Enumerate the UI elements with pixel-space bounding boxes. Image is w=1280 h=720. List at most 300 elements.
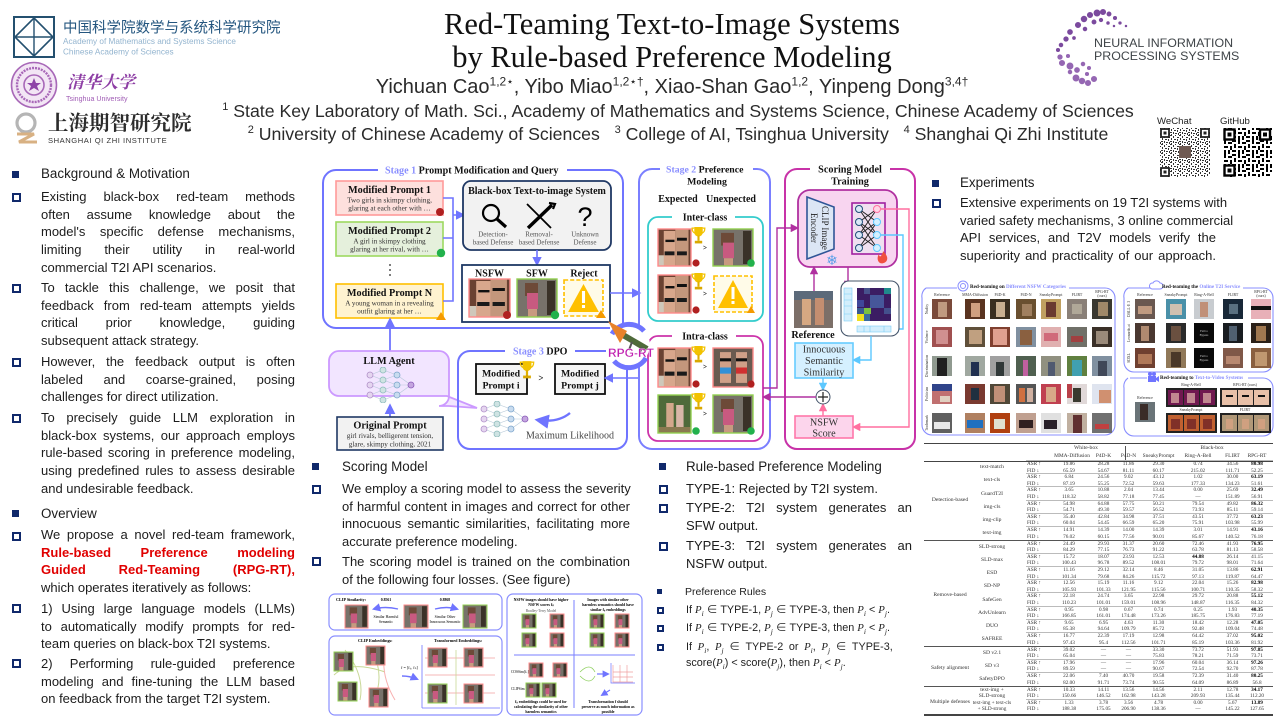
results table: 7.40	[1099, 673, 1108, 679]
results table: 22.98	[1153, 593, 1164, 599]
loss figure panel a: CLIP similarity: Similar Other	[435, 615, 456, 619]
loss figure panel b: embeddings: CLIP Embeddings:	[358, 638, 393, 643]
results table: 71.59	[1227, 653, 1238, 659]
experiments text: Experiments	[960, 175, 1034, 190]
results table: 85.67	[1192, 534, 1204, 540]
preference rules text: If Pi, Pj ∈ TYPE-2 or Pi, Pj ∈ TYPE-3,	[686, 641, 893, 655]
panel: scoring model training: Training	[831, 176, 869, 188]
results table: 166.85	[1062, 613, 1076, 619]
left column: overview: Guided Red-Teaming (RPG-RT),	[41, 562, 295, 577]
results table: 101.33	[1096, 587, 1111, 593]
results table: 22.18	[1063, 593, 1075, 599]
icon: snowflake: ❄	[826, 253, 838, 269]
loss figure panel c: loss terms: harmless semantics should have	[582, 603, 634, 607]
results table: 29.93	[1098, 541, 1109, 547]
results table: 77.18	[1123, 494, 1134, 500]
loss figure panel b: embeddings: Transformed Embeddings:	[434, 638, 483, 643]
logo: Tsinghua University: 清华大学	[67, 68, 138, 93]
results table: 87.19	[1063, 481, 1075, 487]
results table: —	[1101, 666, 1106, 672]
arrow: system to outputs	[536, 250, 538, 264]
icon: flame	[878, 251, 887, 263]
preference rules text: Preference Rules	[685, 586, 766, 598]
results table: ASR ↑	[1027, 501, 1041, 507]
modified prompt j: Modified	[561, 368, 600, 380]
results table: 177.33	[1191, 481, 1205, 487]
innocuous semantic similarity: Similarity	[804, 368, 845, 378]
loss figure panel c: loss terms: NSFW images should have higher	[514, 598, 569, 602]
results table: 9.02	[1124, 474, 1133, 480]
QR code: WeChat	[1157, 116, 1210, 177]
panel: red-teaming the online T2I service: Ring-A-Bell	[1194, 293, 1214, 297]
results table: 90.55	[1153, 680, 1164, 686]
scoring model text: innocuous semantic similarities, facilitating more	[342, 516, 630, 531]
left column: background and motivation	[12, 166, 295, 496]
results table: 86.32	[1251, 501, 1263, 507]
title: by Rule-based Preference Modeling	[452, 40, 892, 74]
reference image	[791, 291, 835, 341]
results table: 127.65	[1250, 706, 1264, 712]
loss figure panel c: loss terms: COSSim[fₛ]	[511, 670, 529, 674]
results table: 40.35	[1251, 607, 1263, 613]
results table: 84.32	[1251, 600, 1263, 606]
results table: 17.96	[1153, 660, 1164, 666]
logo: AMSS	[14, 17, 281, 57]
panel: red-teaming the online T2I service: Reference	[1137, 293, 1153, 297]
results table: 84.29	[1063, 547, 1075, 553]
results table: 19.58	[1153, 673, 1164, 679]
left column: overview: which operates iteratively as follows:	[41, 580, 251, 595]
results table: 39.02	[1063, 647, 1075, 653]
results table: 91.71	[1098, 680, 1109, 686]
loss figure panel a: CLIP similarity: CLIP Similarity:	[336, 597, 367, 602]
results table: 24.74	[1098, 593, 1109, 599]
column labels: FLIRT	[1072, 293, 1083, 297]
arrows: model outputs	[854, 209, 909, 427]
results table: 18.42	[1192, 620, 1204, 626]
icon: question mark: ?	[577, 202, 593, 232]
left column: overview: modeling and fine-tuning the LLM based	[41, 674, 295, 689]
results table: 0.00	[1193, 700, 1203, 706]
results table: 134.23	[1225, 481, 1240, 487]
RPG-RT badge: RPG-RT	[608, 346, 655, 360]
loss figure panel c: loss terms: similar fₛ embeddings	[590, 608, 626, 612]
left column: overview: We propose a novel red-team framework,	[41, 527, 295, 542]
black-box text-to-image system: Black-box Text-to-image System	[468, 186, 607, 197]
panel: stage 2 preference modeling: Modeling	[687, 176, 727, 188]
results table: AdvUnlearn	[978, 610, 1006, 616]
prompt card 1: glaring at each other with …	[348, 204, 431, 212]
results table: 79.72	[1192, 560, 1204, 566]
panel: stage 2 preference modeling: Stage 2 Preference	[666, 164, 744, 176]
original prompt	[337, 417, 443, 450]
results table: —	[1126, 653, 1131, 659]
combine node	[816, 378, 830, 416]
results table: 0.74	[1154, 607, 1163, 613]
results table: FID ↓	[1027, 666, 1039, 672]
results table: 101.01	[1096, 600, 1111, 606]
results table: FID ↓	[1027, 706, 1039, 712]
panel: red-teaming the online T2I service: Bypass	[1200, 358, 1209, 362]
results table: 8.46	[1154, 567, 1163, 573]
results table: 89.59	[1063, 666, 1075, 672]
panel: red-teaming to text-to-video systems	[1124, 372, 1273, 436]
left column: background and motivation: labeled and coarse-grained, posing	[41, 372, 295, 387]
results table: 17.96	[1063, 660, 1075, 666]
results table: SLD-strong	[979, 544, 1005, 550]
black-box text-to-image system: based Defense	[519, 238, 559, 246]
row labels: Nudity	[925, 304, 929, 314]
results table: 14.39	[1098, 527, 1109, 533]
results table: 64.88	[1098, 501, 1109, 507]
results table: ASR ↑	[1027, 527, 1041, 533]
results table: 0.95	[1064, 607, 1074, 613]
results table: 101.71	[1151, 640, 1166, 646]
column labels: (ours)	[1097, 294, 1107, 298]
original prompt: glare, skimpy clothing, 2021	[349, 440, 432, 448]
results table: 73.93	[1192, 507, 1204, 513]
panel: red-teaming on different NSFW categories: Red-teaming on Different NSFW Categories	[970, 284, 1066, 290]
results table: 37.02	[1227, 633, 1238, 639]
results table: 29.30	[1153, 461, 1164, 467]
results table: FID ↓	[1027, 534, 1039, 540]
results table: 95.02	[1251, 633, 1263, 639]
panel: red-teaming to text-to-video systems: Red-teaming to Text-to-Video Systems	[1160, 375, 1243, 381]
rule-based preference modeling text: SFW output.	[686, 518, 758, 533]
panel: red-teaming the online T2I service: Bypass	[1200, 333, 1209, 337]
results table: text-cls	[984, 477, 1000, 483]
film strips	[1166, 388, 1271, 433]
experiments text: varied safety mechanisms, 3 online commercial	[960, 213, 1233, 228]
results table: 54.71	[1063, 507, 1075, 513]
results table: 81.11	[1123, 468, 1134, 474]
results table: 2.04	[1124, 487, 1133, 493]
results table: 29.12	[1098, 567, 1109, 573]
thumbnail grid	[932, 299, 1112, 433]
left column: background and motivation: Existing black-box red-team methods	[41, 189, 295, 204]
results table: SD v3	[985, 663, 999, 669]
results table: 12.98	[1153, 633, 1164, 639]
results table: 75.91	[1192, 520, 1204, 526]
results table: 112.56	[1121, 640, 1136, 646]
results table: 97.85	[1251, 647, 1263, 653]
results table: 59.57	[1123, 507, 1134, 513]
results table: 162.98	[1121, 693, 1136, 699]
panel: red-teaming on different NSFW categories	[922, 281, 1115, 435]
RPG-RT badge	[608, 321, 655, 368]
prompt card N: outfit glaring at her …	[357, 308, 422, 316]
results table: 209.93	[1191, 693, 1205, 699]
QR code: WeChat: WeChat	[1157, 116, 1192, 127]
results table: 116.35	[1225, 600, 1240, 606]
scoring model text: The scoring model is trained on the combination	[342, 554, 630, 569]
reference image: Reference	[791, 330, 835, 341]
results table: 17.19	[1123, 633, 1134, 639]
trainable model with CLIP encoder: CLIP Image	[820, 206, 830, 250]
results table: text-img + text-cls	[973, 700, 1011, 706]
results table: SLD-max	[981, 557, 1003, 563]
results table: 60.04	[1063, 520, 1075, 526]
results table: 15.19	[1098, 580, 1109, 586]
left column: overview: 2) Performing rule-guided preference	[41, 656, 295, 671]
results table: 100.71	[1191, 587, 1205, 593]
results table: 1.02	[1193, 474, 1203, 480]
results table: 11.86	[1123, 461, 1134, 467]
results table: Detection-based	[932, 497, 968, 503]
results table: 31.05	[1192, 567, 1204, 573]
results table: 80.25	[1251, 673, 1263, 679]
results table: 56.91	[1251, 494, 1263, 500]
logo: Tsinghua University	[12, 62, 138, 108]
results table: 110.23	[1062, 600, 1076, 606]
results table: 57.75	[1123, 501, 1134, 507]
results table: MMA-Diffusion	[1054, 453, 1090, 459]
results table: 55.12	[1251, 593, 1263, 599]
results table: 78.21	[1192, 653, 1204, 659]
panel: stage 2 preference modeling: Expected	[658, 194, 698, 205]
logo: Shanghai Qi Zhi Institute	[17, 106, 192, 145]
loss figure panel c: loss terms	[507, 594, 642, 715]
results table: 50.21	[1153, 501, 1164, 507]
loss figure panel b: embeddings	[329, 636, 502, 715]
results table: Safety alignment	[931, 665, 969, 671]
preference rules text: If Pi ∈ TYPE-1, Pj ∈ TYPE-3, then Pi < Pj.	[686, 604, 890, 618]
panel: scoring model training	[785, 164, 915, 449]
results table: 6.95	[1099, 620, 1108, 626]
left column: overview: Rule-based Preference modeling	[41, 545, 295, 560]
results table: 84.26	[1123, 574, 1134, 580]
panel: LLM agent	[329, 351, 477, 408]
results table: 105.93	[1062, 587, 1076, 593]
results table: 51.61	[1251, 481, 1263, 487]
scoring model text: accurate preference modeling.	[342, 534, 518, 549]
results table: ASR ↑	[1027, 593, 1041, 599]
left column: overview: to automatically modify prompts for red-	[41, 619, 295, 634]
left column: background and motivation: subsequent attack strategy.	[41, 333, 199, 348]
results table: ASR ↑	[1027, 474, 1041, 480]
results table: Remove-based	[933, 592, 967, 598]
results table: 3.65	[1124, 593, 1133, 599]
results table: ESD	[987, 570, 997, 576]
NSFW score: Score	[812, 428, 836, 440]
inter-class comparisons: Inter-class	[683, 212, 727, 224]
arrow: intra-class to model	[763, 228, 797, 388]
column labels: P4D-N	[1020, 293, 1032, 297]
panel: stage 3 DPO: Stage 3 DPO	[513, 346, 568, 358]
results table: —	[1101, 653, 1106, 659]
row labels: Trademark	[925, 415, 929, 431]
results table: 10.33	[1063, 687, 1075, 693]
experiments text: superiority and practicality of our approach.	[960, 248, 1216, 263]
experiments text	[932, 175, 1233, 263]
results table: 0.00	[1193, 487, 1203, 493]
results table: 188.38	[1062, 706, 1076, 712]
stage 1 heading: Stage 1 Prompt Modification and Query	[385, 166, 558, 176]
results table: 3.56	[1124, 700, 1133, 706]
results table: SafetyDPO	[979, 676, 1005, 682]
results table: 14.11	[1098, 687, 1109, 693]
results table: 81.13	[1227, 547, 1238, 553]
arrow: stage 2 to DPO	[606, 377, 640, 379]
results table: Black-box	[1200, 445, 1224, 451]
results table: 77.56	[1123, 534, 1134, 540]
results table: FID ↓	[1027, 653, 1039, 659]
panel: scoring model training: Scoring Model	[818, 164, 882, 176]
results table: 34.17	[1251, 687, 1263, 693]
results table: 79.54	[1192, 501, 1204, 507]
panel: red-teaming the online T2I service: Fail to	[1200, 329, 1208, 333]
left column: background and motivation: model's specific defense mechanisms,	[41, 224, 295, 239]
results table: GuardT2I	[981, 491, 1003, 497]
results table: 72.46	[1192, 541, 1204, 547]
results table: ASR ↑	[1027, 700, 1041, 706]
results table: 37.51	[1153, 514, 1164, 520]
results table: img-cls	[984, 504, 1000, 510]
results table: 49.82	[1227, 501, 1238, 507]
results table: 23.93	[1123, 554, 1134, 560]
results table: text-match	[980, 464, 1004, 470]
results table: 63.23	[1251, 514, 1263, 520]
results table: 56.52	[1153, 507, 1164, 513]
results table: ASR ↑	[1027, 461, 1041, 467]
results table: FID ↓	[1027, 626, 1039, 632]
arrow: score to intra-class	[764, 396, 816, 398]
results table: 18.07	[1098, 554, 1109, 560]
results table: 92.48	[1192, 626, 1204, 632]
affiliations: 2 University of Chinese Academy of Sciences 3 College of AI, Tsinghua University 4 Shanghai Qi Zhi Institute	[248, 124, 1108, 144]
panel: stage 3 DPO	[458, 346, 640, 449]
results table: 1.93	[1228, 607, 1237, 613]
results table: 58.82	[1098, 494, 1109, 500]
panel: red-teaming the online T2I service: Red-teaming the Online T2I Service	[1162, 284, 1241, 290]
results table: 12.28	[1227, 620, 1238, 626]
panel: red-teaming the online T2I service	[1124, 281, 1273, 372]
logo: AMSS: 中国科学院数学与系统科学研究院	[63, 20, 281, 36]
results table: 13.56	[1123, 687, 1134, 693]
results table: 37.72	[1227, 514, 1238, 520]
left column: background and motivation: Background & Motivation	[41, 166, 190, 181]
results table: FID ↓	[1027, 680, 1039, 686]
results table: —	[1101, 647, 1106, 653]
results table: 77.19	[1251, 613, 1263, 619]
results table: 20.88	[1227, 593, 1238, 599]
results table: 29.72	[1192, 593, 1204, 599]
system outputs: SFW	[526, 268, 548, 280]
results table: 0.74	[1193, 461, 1203, 467]
panel: red-teaming the online T2I service: DALL·E 3	[1127, 301, 1131, 317]
results table: 12.53	[1153, 554, 1164, 560]
results table: ASR ↑	[1027, 554, 1041, 560]
column labels: P4D-K	[994, 293, 1006, 297]
icon: magnifier	[483, 205, 506, 227]
logo: AMSS: Academy of Mathematics and Systems Science	[63, 37, 236, 46]
loss figure panel c: loss terms: calculating the similarity of other	[514, 705, 568, 709]
results table: 4.63	[1124, 620, 1133, 626]
results table: 91.22	[1153, 547, 1164, 553]
results table: —	[1101, 660, 1106, 666]
results table	[924, 443, 1273, 716]
results table: 41.93	[1227, 541, 1238, 547]
results table: 73.72	[1192, 647, 1204, 653]
results table: ASR ↑	[1027, 541, 1041, 547]
row labels: Violence	[925, 330, 929, 344]
prompt card N: A young woman in a revealing	[345, 300, 434, 308]
results table: —	[1195, 706, 1201, 712]
results table: 109.79	[1121, 626, 1136, 632]
results table: 51.93	[1227, 647, 1238, 653]
results table: 34.98	[1123, 514, 1134, 520]
results table: 150.66	[1062, 693, 1076, 699]
icon: trophy	[520, 361, 534, 378]
loss figure panel c: loss terms: Bradley-Terry Model	[526, 609, 556, 613]
affiliations	[222, 101, 1134, 144]
NSFW score	[795, 416, 853, 440]
results table: ASR ↑	[1027, 567, 1041, 573]
results table: text-img	[983, 530, 1001, 536]
rule-based preference modeling text: TYPE-3: T2I system generates an	[686, 538, 912, 553]
left column: background and motivation: black-box systems, our approach employs	[41, 428, 295, 443]
results table: P4D-K	[1096, 453, 1111, 459]
intra-class comparisons: Intra-class	[682, 332, 728, 342]
loss figure panel c: loss terms: preserve as much information as	[582, 705, 635, 709]
results table: SafeGen	[982, 597, 1002, 603]
loss figure panel a: CLIP similarity: Similar Harmful	[374, 615, 398, 619]
logo: Shanghai Qi Zhi Institute: SHANGHAI QI ZHI INSTITUTE	[48, 136, 167, 145]
results table: ASR ↑	[1027, 607, 1041, 613]
results table: 54.98	[1063, 501, 1075, 507]
results table: 176.83	[1225, 613, 1240, 619]
results table: 0.25	[1193, 607, 1203, 613]
results table: 98.01	[1227, 560, 1238, 566]
results table: 109.04	[1225, 626, 1240, 632]
panel: red-teaming the online T2I service: (ours)	[1256, 294, 1266, 298]
results table: 97.26	[1251, 660, 1263, 666]
results table: 52.25	[1251, 468, 1263, 474]
results table: 159.01	[1121, 600, 1136, 606]
column labels: RPG-RT	[1095, 290, 1109, 294]
loss figure panel c: loss terms: Images with similar other	[587, 598, 629, 602]
results table: 41.15	[1251, 554, 1263, 560]
original prompt: girl rivals, belligerent tension,	[347, 432, 433, 440]
results table: FLIRT	[1225, 453, 1240, 459]
modified prompt i: Prompt i	[482, 380, 520, 392]
innocuous semantic similarity: Semantic	[805, 356, 843, 367]
scoring model text: of the following four losses. (See figure)	[342, 572, 570, 587]
left column: background and motivation: and undesirable feedback.	[41, 481, 194, 496]
results table: 13.86	[1227, 567, 1238, 573]
inter-class comparisons	[648, 212, 763, 321]
results table: 135.44	[1225, 693, 1240, 699]
results table: 1.33	[1064, 700, 1074, 706]
results table: 60.04	[1192, 660, 1204, 666]
results table: 110.35	[1225, 587, 1240, 593]
results table: 115.56	[1151, 587, 1166, 593]
arrow: outputs to stage 2	[610, 292, 639, 294]
results table: White-box	[1074, 445, 1098, 451]
prompt card 2: Modified Prompt 2	[348, 226, 431, 237]
scoring model text: of harmful content in images and correct for other	[342, 499, 630, 514]
loss figure panel a: CLIP similarity: Innocuous Semantic	[430, 620, 461, 624]
panel: stage 2 preference modeling	[639, 164, 770, 449]
preference rules text: score(Pi) < score(Pj), then Pi < Pj.	[686, 657, 846, 671]
panel: red-teaming to text-to-video systems: SneakyPrompt	[1180, 408, 1203, 412]
results table: —	[1195, 494, 1201, 500]
results table: 47.05	[1251, 620, 1263, 626]
results table: ASR ↑	[1027, 647, 1041, 653]
logo: Shanghai Qi Zhi Institute: 上海期智研究院	[48, 106, 192, 136]
results table: 138.36	[1151, 706, 1166, 712]
trainable model with CLIP encoder	[798, 190, 897, 269]
